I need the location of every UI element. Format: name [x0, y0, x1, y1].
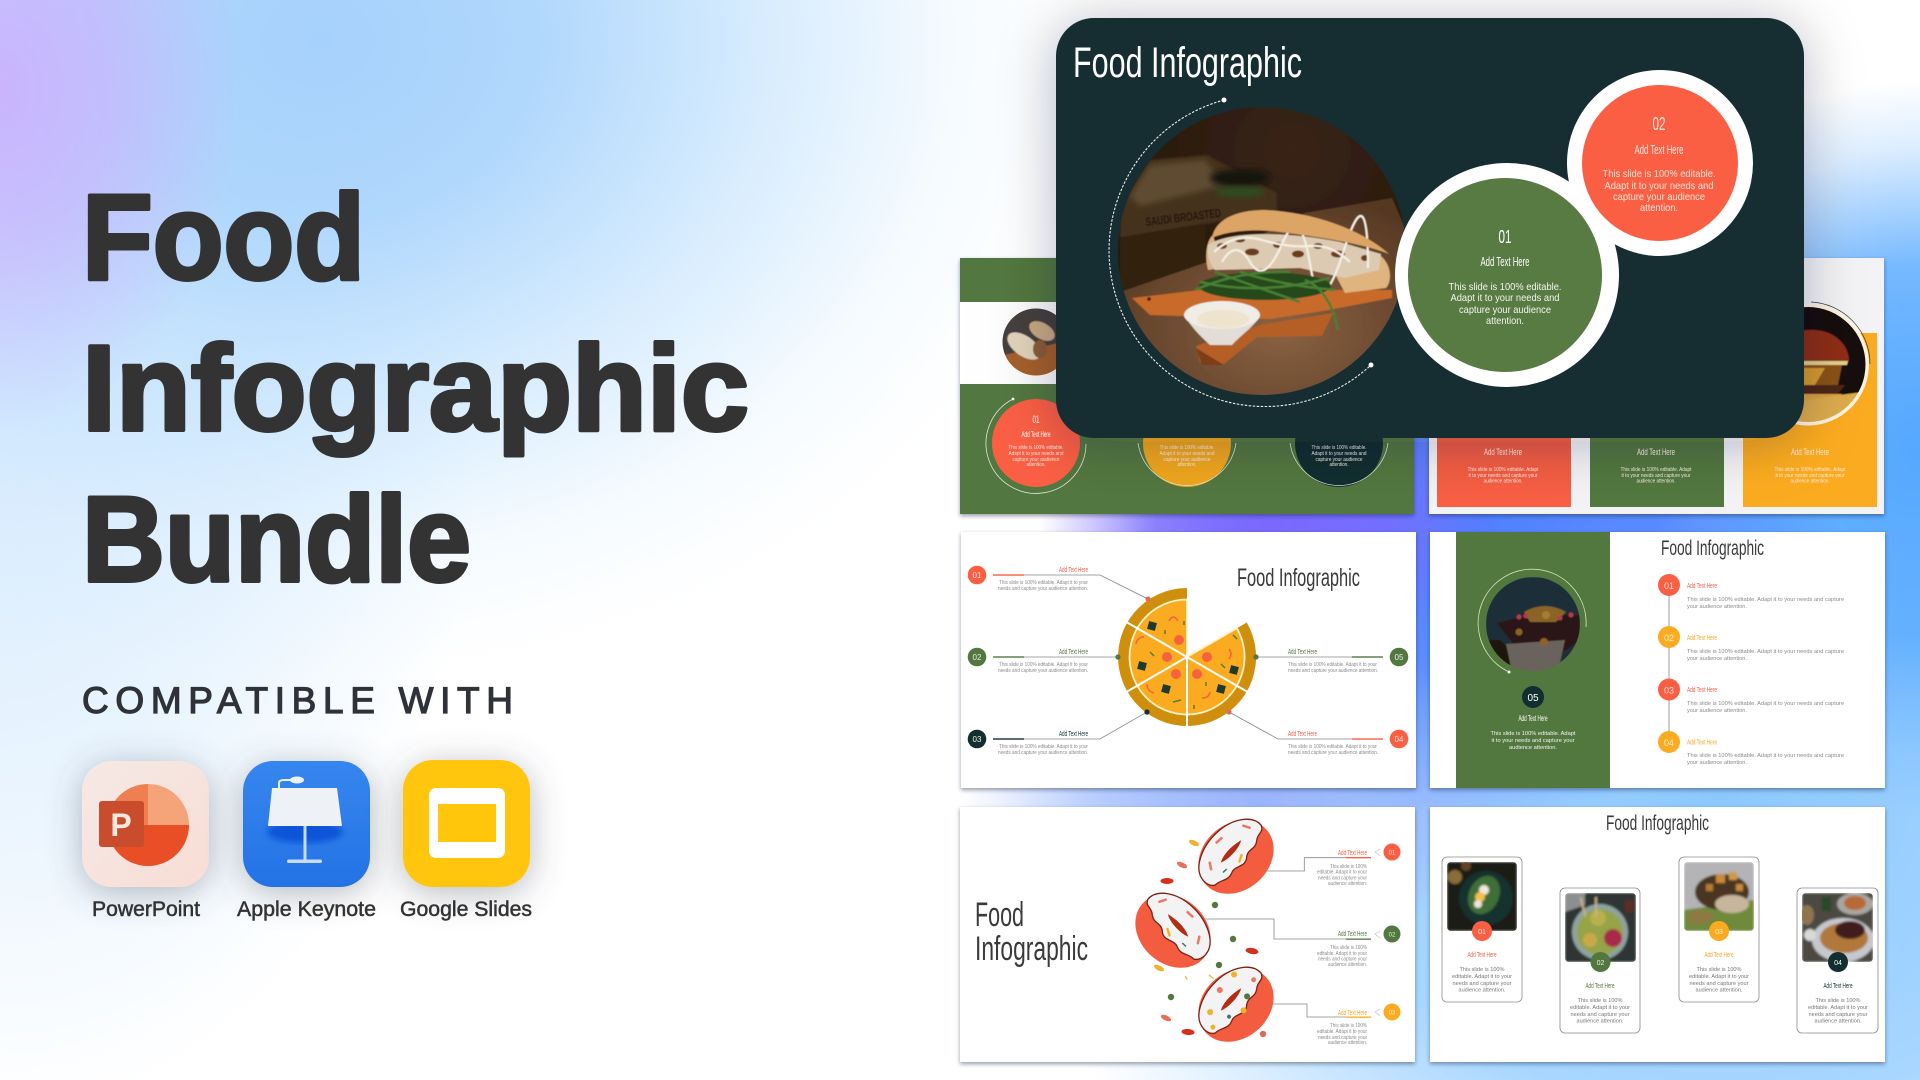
item 02 [968, 648, 1088, 674]
timeline item 02: 02 [1664, 633, 1674, 643]
slide: three colour columns with burger photo: audience attention. [1484, 478, 1522, 484]
item 01: Add Text Here [1338, 850, 1367, 857]
timeline item 02: This slide is 100% editable. Adapt it to your needs and capture [1687, 649, 1844, 655]
slide: three colour columns with burger photo: it to your needs and capture your [1622, 473, 1691, 479]
panel text: This slide is 100% editable. Adapt [1490, 731, 1576, 737]
badge 05 [1522, 686, 1544, 708]
burlap [1120, 198, 1410, 400]
photo: salad [1565, 893, 1636, 962]
card 02: audience attention. [1576, 1018, 1624, 1024]
card 02: editable. Adapt it to your [1570, 1005, 1630, 1011]
crate [1120, 155, 1277, 238]
card 01: audience attention. [1458, 988, 1506, 994]
slide: three colour columns with burger photo: audience attention. [1636, 478, 1676, 484]
timeline item 03: This slide is 100% editable. Adapt it to your needs and capture [1687, 701, 1844, 707]
item 01: needs and capture your [1318, 876, 1367, 882]
timeline [1668, 585, 1670, 742]
item 02: needs and capture your audience attention. [998, 668, 1088, 674]
circle: yellow: capture your audience [1164, 457, 1211, 463]
card 02 [1560, 888, 1640, 1033]
item 02: Add Text Here [1059, 649, 1088, 656]
item 04: needs and capture your audience attention. [1288, 750, 1378, 756]
item 05: 05 [1395, 653, 1404, 662]
item 02: This slide is 100% editable. Adapt it to your [999, 662, 1088, 668]
circle: dark: This slide is 100% editable. [1312, 445, 1366, 451]
item 01: This slide is 100% [1330, 864, 1368, 870]
card 04: Add Text Here [1824, 983, 1853, 990]
item 01: audience attention. [1328, 881, 1367, 887]
heading: Food Infographic Bundle: Infographic [82, 320, 749, 456]
subheading: compatible with: COMPATIBLE WITH [82, 680, 513, 721]
circle: 01 green: 01 [1498, 227, 1512, 247]
photo: eggs [1447, 861, 1517, 931]
timeline item 03: your audience attention. [1687, 708, 1747, 714]
card 02: needs and capture your [1570, 1012, 1630, 1018]
card 04 [1797, 888, 1878, 1033]
title: Food Infographic [1661, 537, 1764, 560]
card 03: editable. Adapt it to your [1689, 974, 1749, 980]
item 03: This slide is 100% [1330, 1023, 1368, 1029]
circle: yellow: attention. [1178, 462, 1196, 468]
title: Food Infographic [1237, 564, 1360, 592]
item 03: 03 [1389, 1010, 1396, 1016]
icon: PowerPoint: P [110, 807, 132, 843]
label: Google Slides: Google Slides [400, 898, 532, 921]
timeline item 01 [1658, 574, 1844, 610]
item 01: 01 [973, 571, 982, 580]
item 05: Add Text Here [1288, 649, 1317, 656]
circle: yellow [1138, 399, 1236, 487]
bun [1335, 254, 1390, 293]
item 03: editable. Adapt it to your [1317, 1029, 1367, 1035]
timeline item 04: This slide is 100% editable. Adapt it to your needs and capture [1687, 753, 1844, 759]
card 04: needs and capture your [1808, 1012, 1868, 1018]
panel text [1490, 714, 1576, 751]
card 02: 02 [1597, 960, 1604, 967]
item 01 [1317, 844, 1400, 887]
circle: yellow: Adapt it to your needs and [1160, 451, 1215, 457]
slide: green three circles with wrap photo [960, 258, 1414, 514]
dashed arc [1109, 100, 1371, 407]
card 01: 01 [1478, 929, 1486, 936]
circle: yellow: This slide is 100% editable. [1160, 445, 1214, 451]
circle: 01 red [986, 398, 1086, 493]
item 03: 03 [973, 735, 982, 744]
slide: three colour columns with burger photo: This slide is 100% editable. Adapt [1468, 467, 1539, 473]
slide: three colour columns with burger photo: Add Text Here [1637, 447, 1675, 457]
icon: PowerPoint [82, 761, 209, 887]
sauce cup [1186, 318, 1259, 345]
timeline item 03: Add Text Here [1687, 687, 1717, 694]
circle: 01 red: Add Text Here [1022, 430, 1051, 439]
circle: dark: attention. [1330, 462, 1348, 468]
circle: 02 red: capture your audience [1613, 191, 1705, 203]
leader lines [993, 575, 1383, 739]
timeline item 02: your audience attention. [1687, 656, 1747, 662]
donut 1 [1183, 805, 1289, 909]
item 03: needs and capture your [1318, 1035, 1367, 1041]
badge 05: 05 [1527, 693, 1539, 704]
item 02: This slide is 100% [1330, 945, 1368, 951]
timeline item 02: Add Text Here [1687, 635, 1717, 642]
item 04: 04 [1395, 735, 1404, 744]
circle: 01 green: Adapt it to your needs and [1450, 292, 1560, 304]
photo: burger [1798, 307, 1866, 422]
card 03: Add Text Here [1704, 952, 1734, 959]
heading: Food Infographic Bundle: Bundle [82, 471, 471, 607]
circle: 02 red: This slide is 100% editable. [1602, 168, 1716, 180]
item 03: needs and capture your audience attention. [998, 750, 1088, 756]
card 04: 04 [1834, 960, 1842, 967]
card 03: This slide is 100% [1696, 967, 1742, 973]
circle: 02 red: attention. [1640, 202, 1678, 214]
item 01: This slide is 100% editable. Adapt it to your [999, 580, 1088, 586]
item 02: 02 [1389, 932, 1396, 938]
photo: cake [1486, 577, 1580, 672]
card 01: editable. Adapt it to your [1452, 974, 1512, 980]
item 01: needs and capture your audience attention. [998, 586, 1088, 592]
photo: roast [1684, 862, 1754, 931]
circle: dark [1290, 399, 1388, 487]
slide: three colour columns with burger photo: it to your needs and capture your [1468, 473, 1538, 479]
slide: three colour columns with burger photo [1429, 258, 1884, 514]
title: Food Infographic [1073, 39, 1302, 87]
filling [1208, 234, 1381, 278]
timeline item 04: 04 [1664, 738, 1674, 748]
item 02: editable. Adapt it to your [1317, 951, 1367, 957]
photo: sandwich [1118, 107, 1410, 400]
arugula [1199, 272, 1331, 300]
board [1196, 313, 1333, 364]
arc dot [1508, 670, 1510, 674]
arc around cake [1478, 569, 1586, 672]
timeline item 04 [1658, 731, 1844, 766]
timeline item 01: your audience attention. [1687, 604, 1747, 610]
timeline item 03: 03 [1664, 686, 1674, 696]
item 01: Add Text Here [1059, 567, 1088, 574]
item 01: 01 [1389, 850, 1396, 856]
item 03: audience attention. [1328, 1040, 1367, 1046]
item 03 [968, 730, 1088, 756]
item 02 [1317, 926, 1400, 968]
item 04: Add Text Here [1288, 731, 1317, 738]
card 03: 03 [1715, 929, 1723, 936]
photo: sandwich: SAUDI BROASTED [1145, 206, 1222, 229]
item 04: This slide is 100% editable. Adapt it to your [1288, 744, 1377, 750]
scattered sprinkles [1153, 838, 1266, 1037]
circle: 01 green: attention. [1486, 315, 1524, 327]
item 04 [1288, 730, 1408, 756]
timeline item 03 [1658, 678, 1844, 714]
card 02: Add Text Here [1586, 983, 1615, 990]
card 02: This slide is 100% [1578, 998, 1623, 1004]
item 02: Add Text Here [1338, 931, 1367, 938]
photo: plates [1800, 893, 1874, 962]
slide: three colour columns with burger photo: audience attention. [1790, 478, 1830, 484]
timeline item 04: Add Text Here [1687, 740, 1717, 746]
item 01: editable. Adapt it to your [1317, 870, 1367, 876]
item 02: 02 [973, 653, 982, 662]
label: PowerPoint: PowerPoint [92, 898, 200, 921]
item 02: audience attention. [1328, 962, 1367, 968]
card 01 [1442, 857, 1522, 1002]
timeline item 01: This slide is 100% editable. Adapt it to your needs and capture [1687, 597, 1844, 603]
item 03: This slide is 100% editable. Adapt it to your [999, 744, 1088, 750]
circle: 01 red: attention. [1026, 462, 1046, 468]
circle: 01 green [1395, 163, 1619, 387]
circle: 02 red [1567, 70, 1753, 256]
icon: Google Slides [403, 760, 530, 887]
icon: Apple Keynote [243, 761, 370, 887]
arc around burger [1811, 302, 1870, 364]
item 03 [1317, 1004, 1400, 1046]
heading: Food Infographic Bundle [82, 169, 749, 607]
card 01: needs and capture your [1452, 981, 1512, 987]
pizza leader dots [1115, 596, 1259, 715]
card 04: This slide is 100% [1816, 998, 1861, 1004]
slide: three colour columns with burger photo: Add Text Here [1791, 447, 1829, 457]
card 01: Add Text Here [1468, 952, 1497, 959]
slide: pizza infographic [961, 532, 1416, 788]
panel text: Add Text Here [1518, 714, 1548, 723]
item 05: needs and capture your audience attention. [1288, 668, 1378, 674]
donut 3 [1183, 953, 1289, 1057]
circle: 01 green: This slide is 100% editable. [1448, 281, 1562, 293]
slide: three colour columns with burger photo: it to your needs and capture your [1776, 473, 1845, 479]
title [975, 896, 1088, 968]
item 02: needs and capture your [1318, 956, 1367, 962]
pizza [1118, 588, 1256, 726]
card 03: needs and capture your [1690, 981, 1749, 987]
circle: 01 red: This slide is 100% editable. [1008, 445, 1064, 451]
leader lines [1200, 858, 1371, 1017]
column labels: Add Text Here [1484, 447, 1522, 457]
panel text: audience attention. [1509, 745, 1557, 751]
donut 2 [1120, 879, 1226, 983]
main featured slide [1056, 18, 1804, 438]
title: Food [975, 896, 1024, 934]
circle: 01 red: 01 [1032, 414, 1040, 426]
item 05: This slide is 100% editable. Adapt it to your [1288, 662, 1377, 668]
card 01: This slide is 100% [1460, 967, 1505, 973]
panel text: it to your needs and capture your [1492, 738, 1575, 744]
item 05 [1288, 648, 1408, 674]
slide: three colour columns with burger photo: This slide is 100% editable. Adapt [1620, 467, 1692, 473]
arc end dots [1222, 98, 1374, 368]
circle: 01 green: capture your audience [1459, 304, 1551, 316]
slide: donuts infographic [960, 805, 1415, 1062]
title: Food Infographic [1606, 812, 1709, 835]
timeline item 01: 01 [1664, 581, 1674, 591]
title: Infographic [975, 930, 1088, 968]
timeline item 04: your audience attention. [1687, 760, 1747, 766]
circle: dark: capture your audience [1316, 457, 1363, 463]
photo: wrap [1002, 308, 1056, 376]
circle: 01 red: capture your audience [1012, 457, 1060, 463]
label: Apple Keynote: Apple Keynote [237, 898, 376, 921]
slide: green panel with cake and timeline [1430, 532, 1885, 788]
item 01 [968, 566, 1088, 592]
timeline item 02 [1658, 626, 1844, 662]
circle: 02 red: Adapt it to your needs and [1604, 180, 1714, 192]
circle: 02 red: Add Text Here [1634, 142, 1684, 157]
card 03 [1679, 857, 1759, 1002]
item 03: Add Text Here [1059, 731, 1088, 738]
slide: four photo cards [1430, 807, 1885, 1062]
slide: three colour columns with burger photo: This slide is 100% editable. Adapt [1774, 467, 1846, 473]
item 03: Add Text Here [1338, 1010, 1367, 1017]
circle: 02 red: 02 [1652, 114, 1666, 134]
heading: Food Infographic Bundle: Food [82, 169, 365, 305]
circle: dark: Adapt it to your needs and [1312, 451, 1367, 457]
timeline item 01: Add Text Here [1687, 583, 1717, 590]
card 04: audience attention. [1814, 1018, 1862, 1024]
card 03: audience attention. [1696, 988, 1743, 994]
card 04: editable. Adapt it to your [1808, 1005, 1868, 1011]
circle: 01 red: Adapt it to your needs and [1008, 451, 1064, 457]
circle: 01 green: Add Text Here [1480, 254, 1530, 269]
